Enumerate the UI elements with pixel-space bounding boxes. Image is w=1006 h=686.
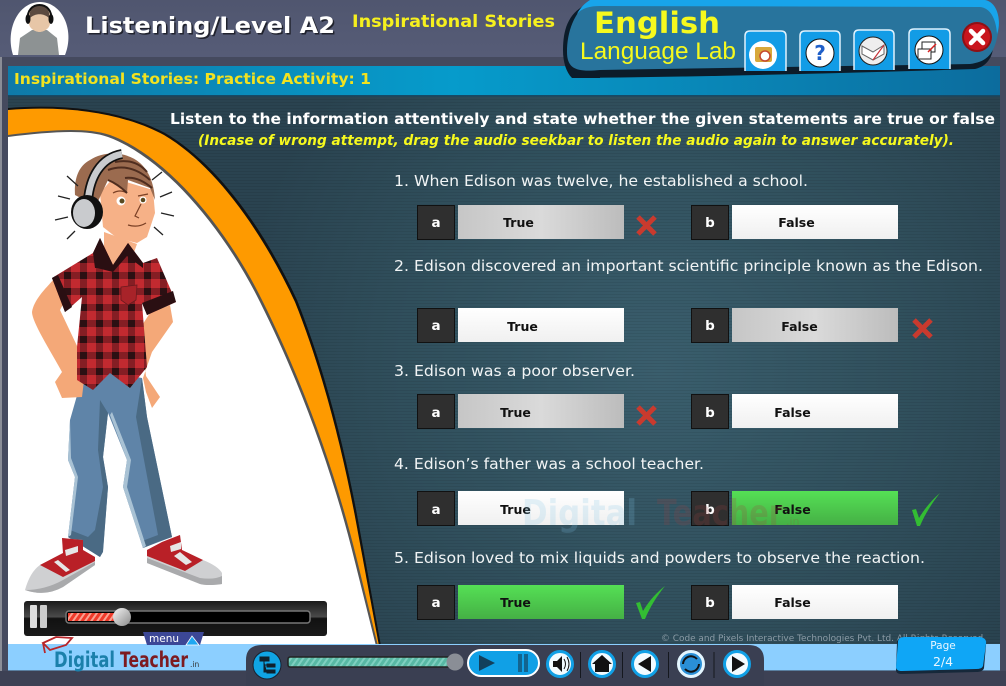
header title: Listening/Level A2 [86, 16, 336, 40]
headphones [88, 154, 122, 200]
question 1: b [705, 215, 715, 231]
icon: back [632, 652, 658, 676]
play and pause capsule [468, 650, 539, 676]
footer strip [8, 644, 1000, 671]
collar and cuffs [52, 238, 176, 315]
right arm [137, 305, 173, 408]
icon: correct check [912, 493, 940, 526]
instructions: (Incase of wrong attempt, drag the audio seekbar to listen the audio again to answer accurately). [198, 133, 954, 149]
page indicator: 2/4 [933, 654, 953, 669]
question 1 [394, 172, 898, 240]
instructions [170, 110, 995, 149]
logo: Digital Teacher [43, 637, 199, 672]
question 5: b [705, 595, 715, 611]
question 1: a [431, 215, 441, 231]
icon: wrong cross [638, 217, 655, 234]
question 5: 5. Edison loved to mix liquids and powders to observe the reaction. [394, 549, 925, 567]
watermark: .in [786, 515, 800, 528]
question 2 [394, 257, 983, 342]
jeans highlight [68, 412, 146, 548]
question 2: False [781, 319, 818, 334]
question 5 [394, 549, 925, 620]
English Language Lab tab [563, 0, 999, 78]
icon: menu tree [253, 651, 281, 679]
jeans [68, 372, 172, 557]
icon: home [590, 652, 614, 676]
question 3: 3. Edison was a poor observer. [394, 362, 635, 380]
watermark [522, 493, 800, 534]
header subtitle: Inspirational Stories [352, 12, 555, 31]
menu tab [143, 632, 204, 645]
menu tab: menu [149, 633, 179, 645]
icon: volume [548, 652, 572, 676]
neck [104, 232, 137, 268]
watermark: Teacher [657, 493, 783, 534]
left shoe [25, 538, 95, 593]
question 4: False [774, 502, 811, 517]
instructions: Listen to the information attentively and state whether the given statements are true or false [170, 110, 995, 128]
question 3: True [500, 405, 531, 420]
control dividers [580, 652, 714, 678]
character: boy with headphones [25, 154, 222, 593]
icon: help tab: ? [814, 41, 826, 65]
logo: Digital Teacher: .in [190, 660, 199, 669]
question 3: b [705, 405, 715, 421]
copyright: © Code and Pixels Interactive Technologies Pvt. Ltd. All Rights Reserved. [661, 634, 986, 644]
page indicator: Page [930, 640, 956, 652]
logo: Digital Teacher: Teacher [120, 648, 188, 672]
question 2: 2. Edison discovered an important scientific principle known as the Edison. [394, 257, 983, 275]
question 3 [394, 362, 898, 428]
icon: wrong cross [638, 407, 655, 424]
question 1: True [503, 215, 534, 230]
question 2: True [507, 319, 538, 334]
page indicator [896, 637, 986, 674]
question 5: True [500, 595, 531, 610]
lab title: English [594, 6, 720, 40]
lab title [580, 6, 736, 65]
right shoe [147, 535, 222, 585]
watermark: Digital [522, 493, 637, 534]
question 4: 4. Edison’s father was a school teacher. [394, 455, 704, 473]
header avatar [11, 2, 68, 55]
question 4: True [500, 502, 531, 517]
icon: wrong cross [914, 320, 931, 337]
eyes and mouth [116, 196, 126, 206]
shirt [52, 238, 176, 390]
icon: resize tab [909, 29, 950, 69]
header title: Listening/Level A2 [85, 14, 335, 39]
activity title bar: Inspirational Stories: Practice Activity: 1 [14, 70, 371, 88]
sound lines [55, 172, 174, 239]
icon: next [724, 652, 750, 676]
question 2: a [431, 318, 441, 334]
question 5: a [431, 595, 441, 611]
audio player [24, 601, 327, 636]
question 1: False [778, 215, 815, 230]
question 3: False [774, 405, 811, 420]
lab title: Language Lab [580, 38, 736, 65]
question 1: 1. When Edison was twelve, he established a school. [394, 172, 808, 190]
question 4: b [705, 502, 715, 518]
shirt pocket [121, 285, 137, 305]
pause button [30, 605, 47, 628]
icon: help tab [800, 31, 840, 71]
question 4 [394, 455, 940, 526]
icon: close button [962, 22, 992, 52]
question 5: False [774, 595, 811, 610]
question 3: a [431, 405, 441, 421]
question 4: a [431, 502, 441, 518]
main content panel [8, 96, 1000, 646]
audio seek track [66, 608, 310, 626]
bottom control bar [246, 645, 764, 686]
icon: correct check [636, 586, 665, 619]
icon: history folder tab [745, 31, 786, 71]
activity title bar [8, 66, 1000, 96]
logo: Digital Teacher: Digital [54, 648, 115, 672]
illustration panel: orange arc with white background [8, 107, 381, 646]
icon: reload [678, 652, 704, 676]
icon: book tab [854, 30, 894, 70]
face [100, 178, 155, 243]
jeans shading [68, 378, 172, 557]
progress bar [288, 654, 464, 670]
question 2: b [705, 318, 715, 334]
left arm [32, 278, 85, 398]
hair [75, 154, 155, 206]
